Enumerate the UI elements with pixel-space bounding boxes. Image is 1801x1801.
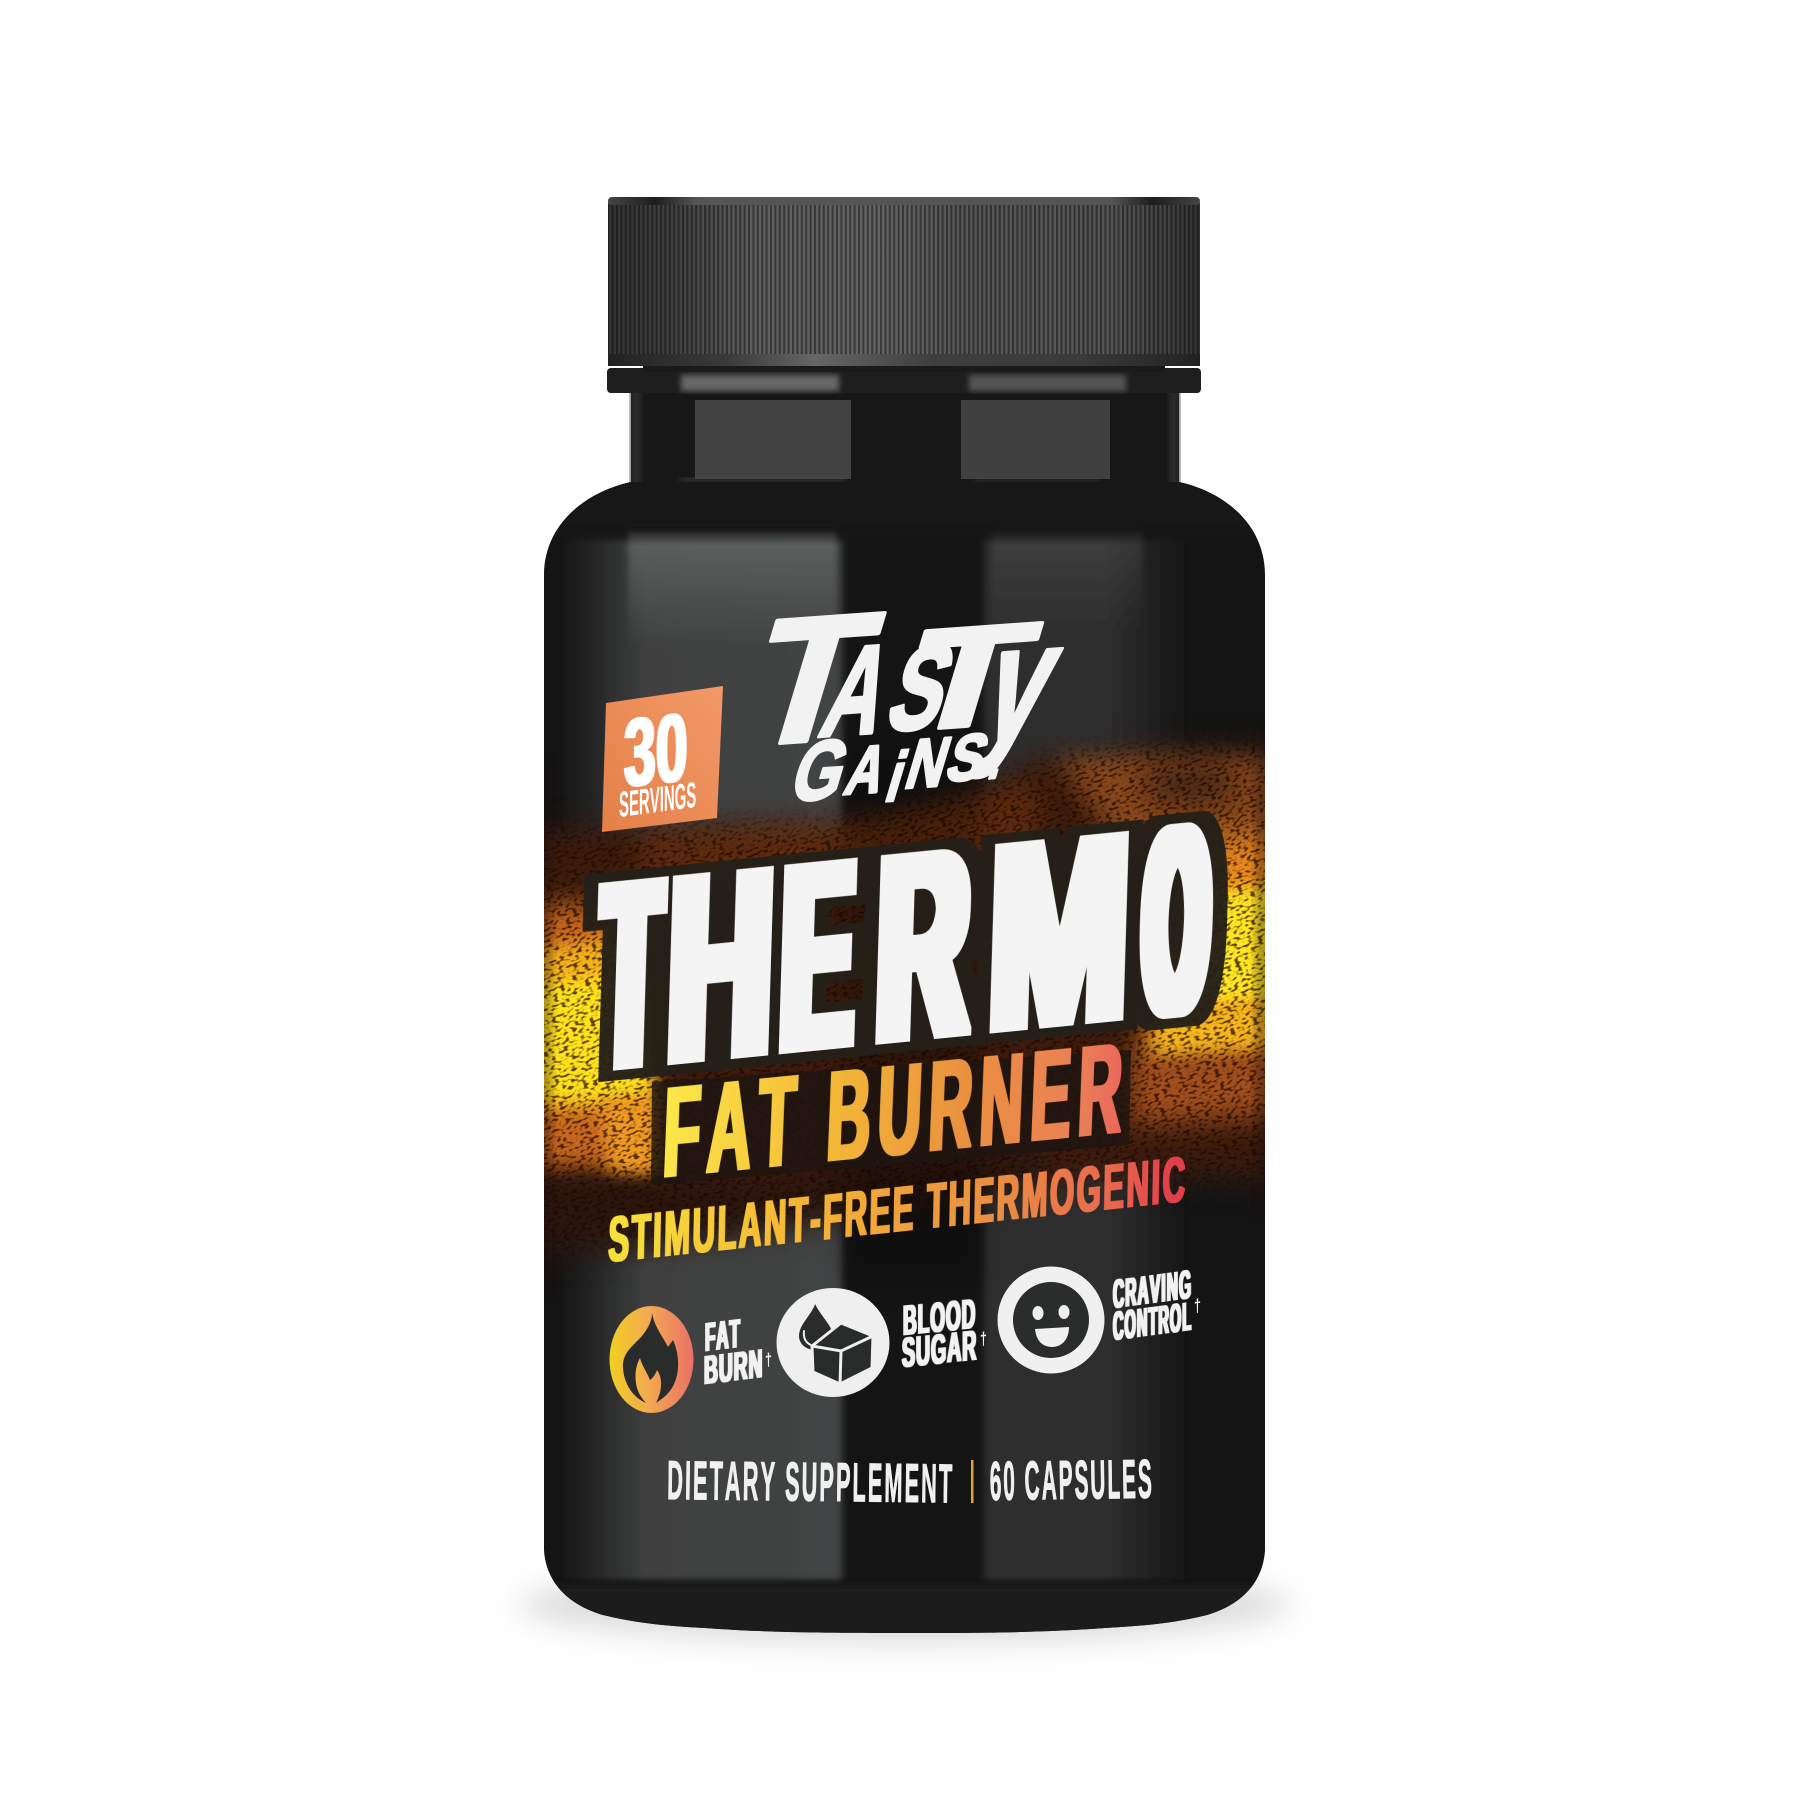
- body edge shading: [544, 842, 556, 1182]
- title: THERMO: [599, 769, 1212, 1124]
- icon: flame badge: [610, 1306, 694, 1413]
- label: FAT BURN: †: [765, 1349, 772, 1370]
- label: FAT BURN: FAT: [705, 1312, 741, 1360]
- benefit: craving control: [998, 1263, 1201, 1374]
- label: CRAVING CONTROL: †: [1194, 1295, 1201, 1316]
- logo word: Gains: i: [878, 738, 916, 817]
- product bottle illustration: CONTROL: [1113, 1295, 1192, 1349]
- logo word: Gains: A: [838, 730, 896, 809]
- logo word: Gains: !: [981, 724, 1015, 791]
- label: BLOOD SUGAR: †: [980, 1328, 987, 1349]
- product bottle illustration: [521, 197, 1289, 1653]
- label: BLOOD SUGAR: BLOOD: [903, 1290, 976, 1344]
- logo word: Tasty: A: [808, 617, 909, 764]
- title: THERMO: M: [985, 777, 1133, 1086]
- label: BLOOD SUGAR: [902, 1290, 987, 1376]
- product bottle illustration: O: [1141, 769, 1212, 1071]
- badge number: 30: [624, 692, 688, 808]
- dark reflection gap across band: [838, 786, 986, 1206]
- benefit: blood sugar: [776, 1288, 987, 1397]
- product bottle illustration: CRAVING: [1113, 1263, 1192, 1317]
- title: THERMO: H: [665, 812, 777, 1117]
- footer text: dietary supplement and capsule count: DIETARY SUPPLEMENT: [667, 1449, 955, 1515]
- title: THERMO: T: [599, 824, 663, 1124]
- badge: 30 servings: SERVINGS: [619, 774, 696, 825]
- cap lower flange: [607, 368, 1201, 393]
- bottle neck: [631, 385, 1179, 487]
- badge: 30 servings: [602, 686, 723, 832]
- logo word: Gains: S: [939, 720, 997, 796]
- benefit: fat burn: [610, 1306, 772, 1413]
- icon: blood drop and sugar cube: [776, 1288, 890, 1397]
- label: FAT BURN: [704, 1312, 772, 1393]
- tagline: stimulant-free thermogenic: STIMULANT-FREE THERMOGENIC: [608, 1142, 1188, 1276]
- logo word: Gains: N: [898, 723, 959, 804]
- product bottle illustration: 60 CAPSULES: [989, 1448, 1154, 1512]
- ribbed cap skirt: [608, 198, 1200, 366]
- title: THERMO: E: [779, 804, 857, 1106]
- brand logo: Tasty Gains: [713, 561, 1089, 829]
- subtitle backing and text: FAT BURNER: FAT BURNER: [661, 1016, 1132, 1205]
- icon: smiley: [998, 1266, 1104, 1374]
- body reflections: [550, 526, 1260, 1580]
- label: BLOOD SUGAR: SUGAR: [902, 1321, 977, 1376]
- label: FAT BURN: BURN: [704, 1342, 763, 1393]
- logo word: Tasty: T: [885, 592, 1053, 762]
- logo word: Gains: G: [782, 721, 860, 820]
- logo word: Tasty: y: [964, 585, 1082, 779]
- logo word: Tasty: T: [726, 575, 898, 785]
- flame texture band: [544, 736, 1265, 1263]
- label: CRAVING CONTROL: [1113, 1263, 1201, 1349]
- logo word: Tasty: S: [875, 618, 969, 756]
- ground shadow: [520, 1567, 1290, 1643]
- bottle body: [544, 482, 1265, 1633]
- footer divider: [971, 1460, 974, 1503]
- footer text: dietary supplement and capsule count: [667, 1448, 1154, 1515]
- title: THERMO: R: [874, 793, 973, 1097]
- bottle cap: [607, 197, 1201, 393]
